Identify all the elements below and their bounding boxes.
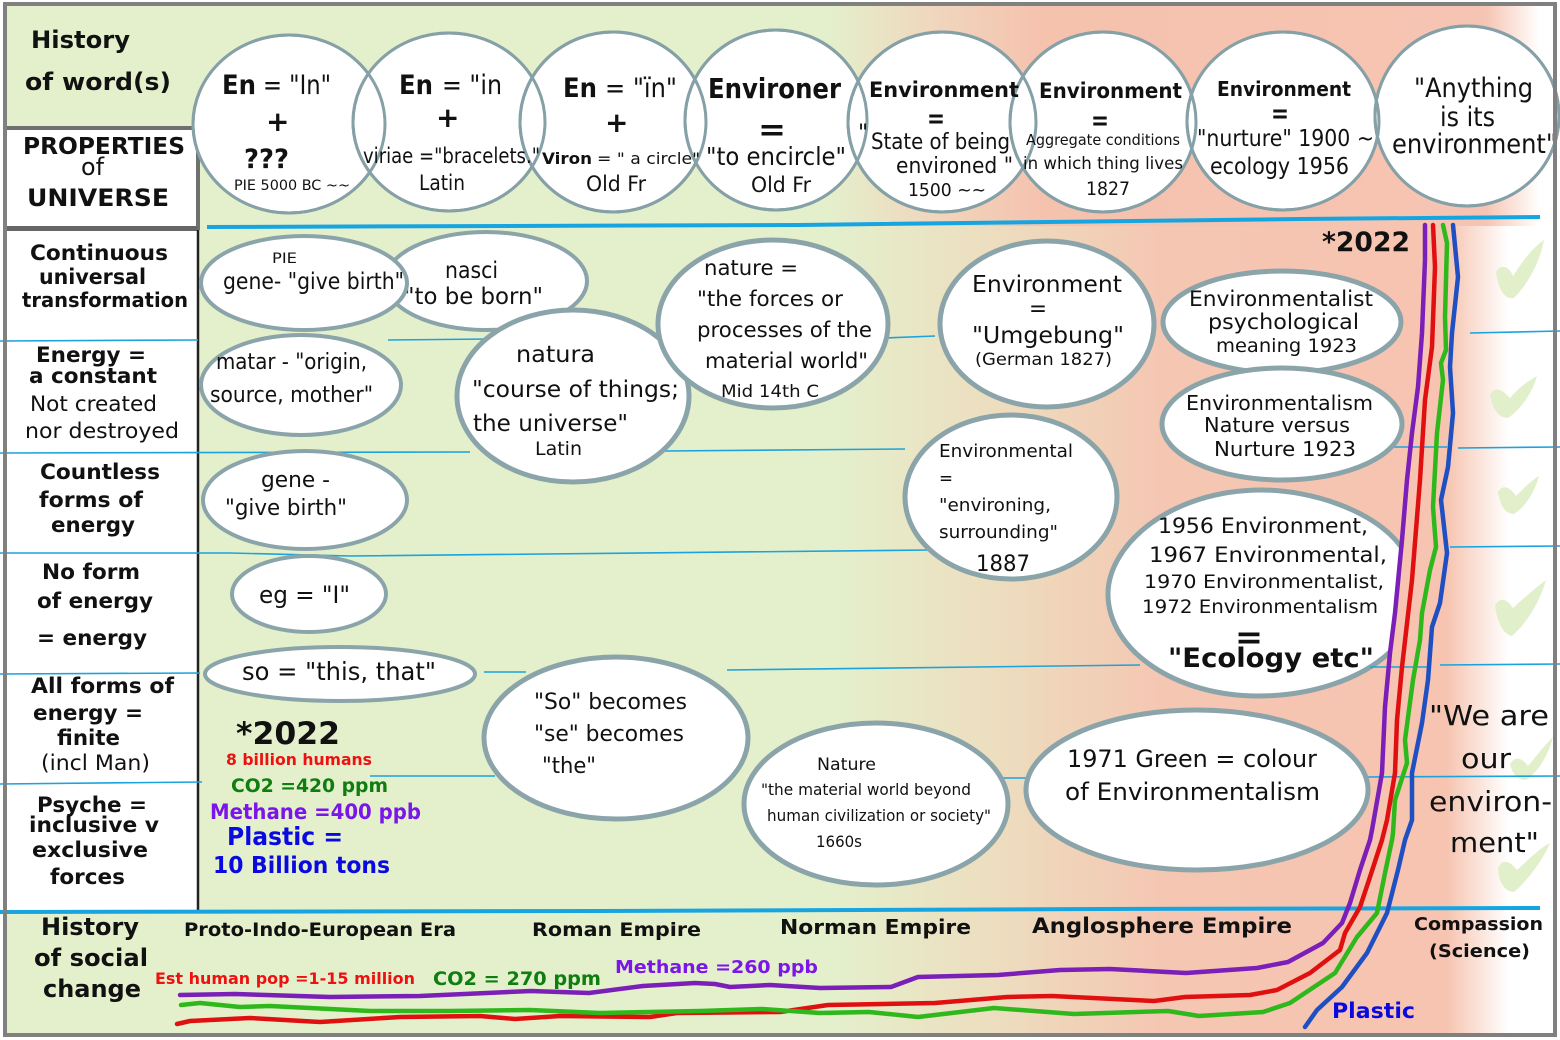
circle text: Environment nurture ecology: "nurture" 1900 ~ [1197, 126, 1374, 152]
heading: history of words: History [31, 26, 130, 54]
oval: Nature material world [744, 723, 1008, 885]
oval: Environmentalism nature versus nurture: Environmentalism [1186, 391, 1373, 415]
era labels: Proto-Indo-European Era [184, 919, 456, 941]
oval: nasci to be born: "to be born" [404, 284, 543, 310]
circle text: En in viriae: + [436, 101, 459, 134]
oval: Ecology etc: 1970 Environmentalist, [1144, 571, 1384, 593]
oval: Environment Umgebung: Environment [972, 272, 1122, 298]
oval: PIE gene give birth: PIE [272, 251, 297, 267]
thick blue divider lines [0, 217, 1540, 912]
property: countless forms of energy [39, 460, 160, 537]
oval: Ecology etc: 1972 Environmentalism [1142, 596, 1378, 618]
property: energy a constant: Not created [30, 392, 157, 416]
circle text: Environer: = [758, 113, 786, 148]
oval: Environmentalist psychological: meaning 1923 [1216, 335, 1357, 357]
stats 2022: Methane =400 ppb [210, 800, 421, 824]
circle text: En in Viron [542, 73, 700, 196]
property: energy a constant: Energy = [36, 343, 146, 367]
early history stat labels: Est human pop =1-15 million [155, 969, 415, 988]
property: countless forms of energy: Countless [40, 460, 160, 484]
circle text: En in viriae: Latin [419, 171, 465, 195]
oval: natura: "course of things; [472, 377, 679, 403]
property: energy a constant [25, 343, 179, 443]
oval: 1971 Green: of Environmentalism [1065, 778, 1320, 806]
oval: Environment Umgebung: "Umgebung" [972, 323, 1124, 349]
property: countless forms of energy: energy [51, 513, 135, 537]
oval: So becomes se becomes the: "the" [542, 754, 596, 779]
property: continuous universal transformation: transformation [22, 288, 188, 312]
oval: nature forces: "the forces or [697, 287, 843, 311]
property: all forms of energy finite [31, 674, 175, 775]
early history stat labels [155, 957, 1415, 1023]
era labels: Compassion [1414, 914, 1543, 935]
heading: history of social change [34, 913, 148, 1003]
heading: properties of universe: PROPERTIES [23, 134, 185, 160]
left column: properties panel [4, 128, 198, 910]
oval: Ecology etc [1108, 490, 1430, 696]
circle text: En In: PIE 5000 BC ~~ [234, 178, 350, 194]
early history stat labels: Plastic [1332, 999, 1415, 1023]
circle text: Environment state of being: = [927, 104, 945, 134]
property: energy a constant: nor destroyed [25, 419, 179, 443]
label: 2022 top: *2022 [1322, 227, 1410, 258]
circle text: Environment state of being: State of being [871, 130, 1010, 155]
oval: nature forces: processes of the [697, 318, 872, 342]
circle text: En In: + [266, 105, 289, 138]
oval: so this that: so = "this, that" [242, 657, 436, 686]
circle text: En In: En [222, 70, 256, 101]
property: psyche inclusive v exclusive forces: forces [50, 865, 125, 889]
early history stat labels: Methane =260 ppb [615, 957, 818, 978]
quote: we are our environment: environ- [1429, 785, 1552, 818]
circle text: En In: ??? [244, 144, 289, 175]
stats 2022: 10 Billion tons [213, 853, 390, 879]
circle text: Environment aggregate conditions [1023, 79, 1183, 200]
oval: Environmentalism nature versus nurture: Nature versus [1204, 413, 1350, 437]
property: continuous universal transformation: Continuous [30, 241, 168, 265]
oval: Environmental environing: 1887 [976, 552, 1030, 577]
property: no form of energy: of energy [37, 589, 153, 613]
circle text: Environer [706, 72, 846, 197]
oval: Ecology etc: 1956 Environment, [1158, 514, 1368, 538]
curve: plastic blue [1305, 225, 1458, 1027]
quote: we are our environment [1429, 699, 1552, 859]
oval: PIE gene give birth [201, 236, 407, 330]
oval: nature forces [658, 240, 888, 408]
circle text: Anything is its environment: is its [1440, 102, 1495, 133]
property: no form of energy: = energy [37, 626, 147, 650]
circle text: Environment state of being: environed " [896, 154, 1013, 179]
property: psyche inclusive v exclusive forces [29, 793, 159, 889]
oval: Environmentalist psychological: psychological [1208, 310, 1359, 334]
circle text: Anything is its environment [1392, 73, 1557, 160]
circle text: Environer: Old Fr [751, 173, 811, 197]
circle text: En In [222, 70, 350, 194]
stats 2022: 8 billion humans [226, 750, 372, 769]
circle text: En in Viron: = " a circle" [597, 149, 700, 168]
oval: natura: Latin [535, 438, 582, 460]
quote: we are our environment: our [1461, 742, 1512, 775]
circle text: Environer: "to encircle" [706, 142, 846, 171]
oval: so this that [205, 647, 475, 701]
oval: nasci to be born: nasci [445, 258, 498, 284]
oval: Nature material world: "the material world beyond [761, 780, 971, 799]
stats 2022 [210, 716, 421, 879]
oval: Environmentalist psychological: Environmentalist [1189, 287, 1373, 311]
property: psyche inclusive v exclusive forces: inclusive v [29, 813, 159, 837]
curve: CO2 green [181, 225, 1447, 1017]
curve: methane purple [180, 225, 1425, 997]
oval: Ecology etc: = [1235, 618, 1263, 656]
era labels: Roman Empire [532, 919, 701, 941]
oval: Ecology etc: 1967 Environmental, [1149, 543, 1387, 567]
circle text: Environment nurture ecology [1197, 77, 1374, 180]
heading: history of social change: History [41, 913, 139, 941]
property: continuous universal transformation [22, 241, 188, 312]
oval: nature forces: material world" [705, 349, 868, 373]
oval: So becomes se becomes the [484, 657, 748, 819]
property: all forms of energy finite: (incl Man) [41, 751, 150, 775]
oval: Environment Umgebung: (German 1827) [975, 350, 1112, 370]
oval: 1971 Green: 1971 Green = colour [1067, 745, 1317, 773]
quote: we are our environment: ment" [1450, 826, 1539, 859]
circle text: Environment state of being: Environment [869, 78, 1019, 102]
oval: 1971 Green [1026, 710, 1368, 870]
oval: Nature material world: 1660s [816, 832, 862, 851]
circle text: Environment nurture ecology: Environment [1217, 77, 1351, 101]
oval: gene give birth: "give birth" [225, 496, 347, 521]
circle text: Environer: Environer [708, 72, 841, 105]
circle text: En in viriae: En [399, 70, 433, 101]
circle text: Environment aggregate conditions: 1827 [1086, 178, 1130, 200]
circle text: En In: = "In" [263, 70, 331, 101]
oval: Nature material world: human civilization or society" [767, 806, 991, 825]
top circle fills [193, 26, 1559, 213]
oval: gene give birth: gene - [261, 468, 330, 493]
oval: matar: source, mother" [210, 383, 373, 408]
oval: gene give birth [203, 451, 407, 549]
circle text: En in Viron: En [563, 73, 597, 104]
curve: human population red [177, 225, 1435, 1024]
oval: Environmentalism nature versus nurture [1162, 368, 1402, 480]
property: energy a constant: a constant [29, 364, 157, 388]
property: all forms of energy finite: All forms of [31, 674, 175, 698]
heading: properties of universe: UNIVERSE [27, 184, 169, 212]
era labels: (Science) [1429, 941, 1530, 962]
oval: Nature material world: Nature [817, 755, 876, 775]
property: no form of energy: No form [42, 560, 140, 584]
heading: history of words [25, 26, 171, 96]
oval: Environmental environing: "environing, [939, 495, 1051, 516]
oval: natura: natura [516, 342, 595, 368]
property: all forms of energy finite: energy = [33, 701, 143, 725]
circle text: Environment nurture ecology: ecology 1956 [1210, 154, 1349, 180]
check marks column [1490, 240, 1553, 892]
circle text: En in viriae: viriae ="bracelets." [363, 144, 540, 168]
oval: nasci to be born [385, 232, 587, 330]
era labels [184, 914, 1543, 962]
quote: we are our environment: "We are [1429, 699, 1549, 732]
circle text: En in Viron: = "ïn" [605, 73, 677, 104]
oval: eg I: eg = "I" [259, 581, 350, 609]
heading: properties of universe [23, 134, 185, 212]
oval: Environmental environing: = [939, 468, 953, 489]
circle text: Anything is its environment: "Anything [1414, 73, 1533, 104]
oval: nature forces: nature = [704, 256, 798, 280]
oval: PIE gene give birth: gene- "give birth" [223, 269, 404, 295]
oval: Environmental environing: surrounding" [939, 522, 1058, 543]
circle text: En in Viron: + [605, 106, 628, 139]
property: countless forms of energy: forms of [39, 488, 144, 512]
thin blue row lines [0, 331, 1560, 784]
stats 2022: *2022 [236, 716, 340, 752]
era labels: Norman Empire [780, 915, 971, 939]
circle text: En in Viron: Old Fr [586, 172, 646, 196]
circle text: Environment state of being: 1500 ~~ [908, 180, 986, 201]
oval: Environment Umgebung: = [1029, 296, 1047, 322]
oval: Environmental environing [905, 415, 1117, 579]
circle text: En in viriae [363, 70, 540, 195]
oval: Environmental environing: Environmental [939, 441, 1073, 462]
oval: eg I [232, 556, 386, 632]
property: continuous universal transformation: universal [39, 265, 146, 289]
circle text: Environment nurture ecology: = [1271, 99, 1289, 129]
oval: matar: matar - "origin, [216, 350, 367, 375]
oval: nature forces: Mid 14th C [721, 382, 819, 402]
oval: So becomes se becomes the: "So" becomes [534, 690, 687, 715]
circle text: En in viriae: = "in [442, 70, 502, 101]
oval: Environmentalism nature versus nurture: Nurture 1923 [1214, 437, 1356, 461]
oval: Environmentalist psychological [1163, 271, 1401, 373]
circle text: Environment aggregate conditions: = [1091, 106, 1109, 136]
early history stat labels: CO2 = 270 ppm [433, 968, 601, 990]
oval: Ecology etc: "Ecology etc" [1168, 643, 1374, 674]
oval: natura [457, 310, 689, 482]
property: psyche inclusive v exclusive forces: Psyche = [37, 793, 147, 817]
oval: Environment Umgebung [940, 241, 1154, 407]
circle text: Environment state of being: " [858, 121, 868, 146]
oval: So becomes se becomes the: "se" becomes [534, 722, 684, 747]
heading: history of social change: change [43, 975, 141, 1003]
stats 2022: CO2 =420 ppm [231, 775, 388, 797]
property: all forms of energy finite: finite [57, 726, 120, 750]
stats 2022: Plastic = [227, 822, 343, 851]
property: psyche inclusive v exclusive forces: exclusive [32, 838, 148, 862]
circle text: Environment aggregate conditions: Aggregate conditions [1026, 131, 1180, 149]
circle text: Environment aggregate conditions: in which thing lives [1023, 154, 1183, 174]
era labels: Anglosphere Empire [1032, 914, 1292, 938]
circle text: Environment aggregate conditions: Environment [1039, 79, 1182, 103]
circle text: Environment state of being [858, 78, 1019, 201]
oval: natura: the universe" [473, 411, 628, 437]
property: no form of energy [37, 560, 153, 650]
circle text: En in Viron: Viron [542, 149, 592, 168]
heading: history of social change: of social [34, 944, 148, 972]
heading: properties of universe: of [81, 153, 105, 181]
oval: matar [201, 335, 401, 435]
heading: history of words: of word(s) [25, 68, 171, 96]
